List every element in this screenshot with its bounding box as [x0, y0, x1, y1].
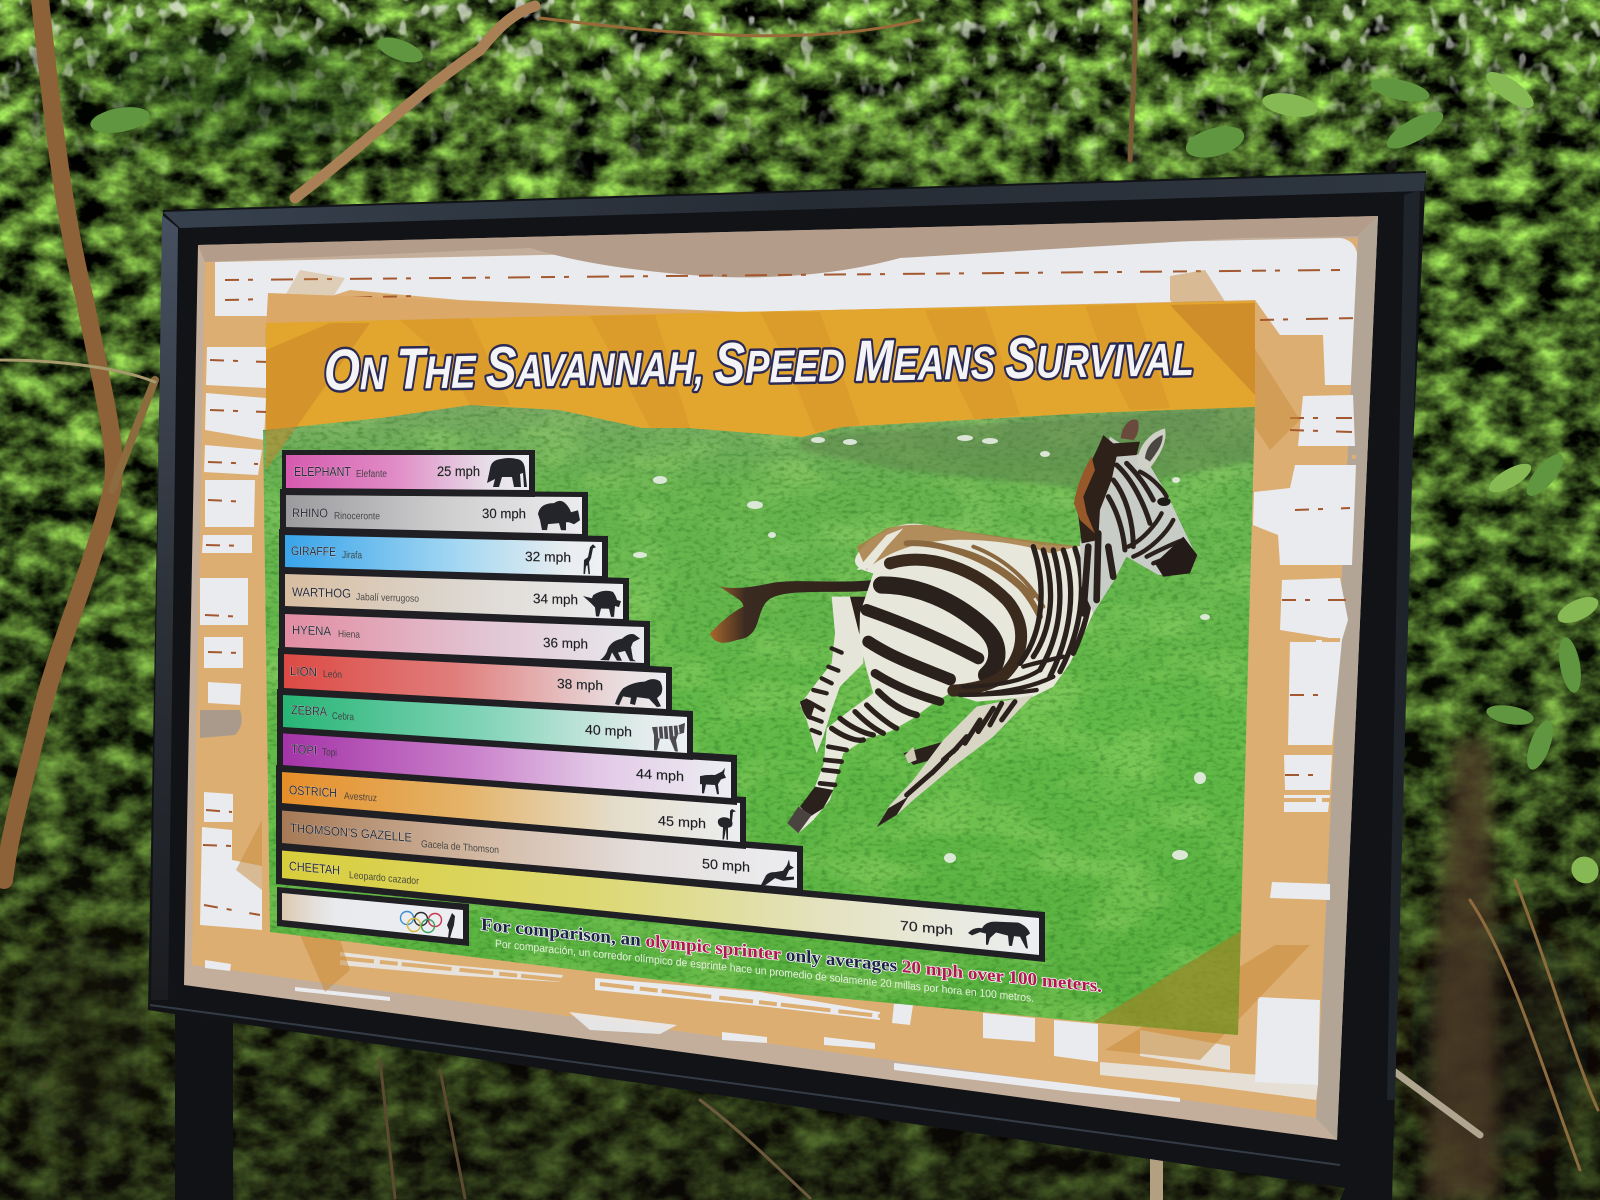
hyena bar [279, 608, 650, 670]
elephant bar: ELEPHANT [294, 465, 351, 479]
olympic rings [400, 912, 442, 932]
comparison note: For comparison, an olympic sprinter only averages 20 mph over 100 meters. [481, 914, 1102, 996]
icon: sprinter [447, 913, 455, 938]
lion bar: LION [290, 664, 317, 679]
shoulder stripes [960, 547, 1090, 695]
warthog bar: Jabalí verrugoso [356, 592, 419, 605]
cheetah bar [276, 842, 1045, 962]
elephant bar: Elefante [356, 469, 387, 480]
meadow flowers [633, 435, 1210, 863]
warthog bar [279, 568, 629, 626]
giraffe bar [279, 529, 608, 583]
title banner [266, 301, 1255, 470]
body and hind leg [787, 524, 1120, 833]
tan strip above title banner [266, 293, 1255, 330]
giraffe bar: GIRAFFE [291, 544, 336, 559]
rhino bar [280, 489, 588, 541]
topi bar [277, 727, 737, 805]
cheetah bar: CHEETAH [289, 859, 340, 878]
topi bar: Topi [322, 747, 337, 759]
warthog bar: WARTHOG [292, 585, 351, 601]
far hind leg [800, 597, 868, 753]
tail [710, 580, 873, 643]
lion bar: León [323, 669, 342, 681]
topi bar: TOPI [291, 742, 317, 758]
grass photo panel [250, 400, 1270, 1050]
elephant bar [282, 450, 535, 497]
lion bar [278, 648, 672, 716]
cheetah bar: Leopardo cazador [349, 870, 420, 887]
hyena bar: 36 mph [543, 635, 588, 652]
giraffe bar: Jirafa [342, 550, 362, 561]
zebra bar: Cebra [332, 711, 354, 723]
rhino bar: Rinoceronte [334, 511, 380, 522]
ostrich bar: 45 mph [658, 813, 706, 831]
zebra bar: ZEBRA [291, 703, 328, 719]
giraffe bar: 32 mph [525, 549, 571, 565]
neck and head [1074, 419, 1197, 613]
gazelle bar: 50 mph [702, 856, 750, 875]
distressed orange and white border [192, 216, 1378, 1140]
comparison note: Por comparación, un corredor olímpico de esprinte hace un promedio de solamente 20 millas por hora en 100 metros. [495, 938, 1034, 1005]
hyena bar: Hiena [338, 629, 360, 641]
running zebra photo [710, 419, 1197, 833]
gazelle bar: Gacela de Thomson [421, 839, 499, 856]
speed bar chart [276, 450, 1045, 962]
gazelle bar: THOMSON'S GAZELLE [290, 821, 412, 845]
sign posts [175, 1000, 1163, 1200]
black sign frame [148, 171, 1426, 1200]
rhino bar: 30 mph [482, 506, 526, 521]
cheetah bar: 70 mph [900, 918, 953, 938]
lion bar: 38 mph [557, 676, 603, 693]
hyena bar: HYENA [292, 623, 332, 638]
warthog bar: 34 mph [533, 591, 578, 607]
topi bar: 44 mph [636, 766, 684, 784]
title text: ON THE SAVANNAH, SPEED MEANS SURVIVAL [324, 323, 1194, 403]
zebra bar [277, 689, 693, 760]
gazelle bar [276, 803, 803, 895]
top wave shading [198, 216, 1378, 277]
rump stripes [787, 525, 1090, 833]
rhino bar: RHINO [292, 506, 328, 520]
ostrich bar: Avestruz [344, 791, 377, 804]
ostrich bar: OSTRICH [289, 783, 337, 800]
ostrich bar [276, 765, 746, 849]
zebra bar: 40 mph [585, 722, 632, 740]
elephant bar: 25 mph [437, 464, 480, 479]
front legs [877, 695, 1033, 827]
olympic sprinter bar [277, 887, 469, 946]
poster board [184, 216, 1378, 1140]
